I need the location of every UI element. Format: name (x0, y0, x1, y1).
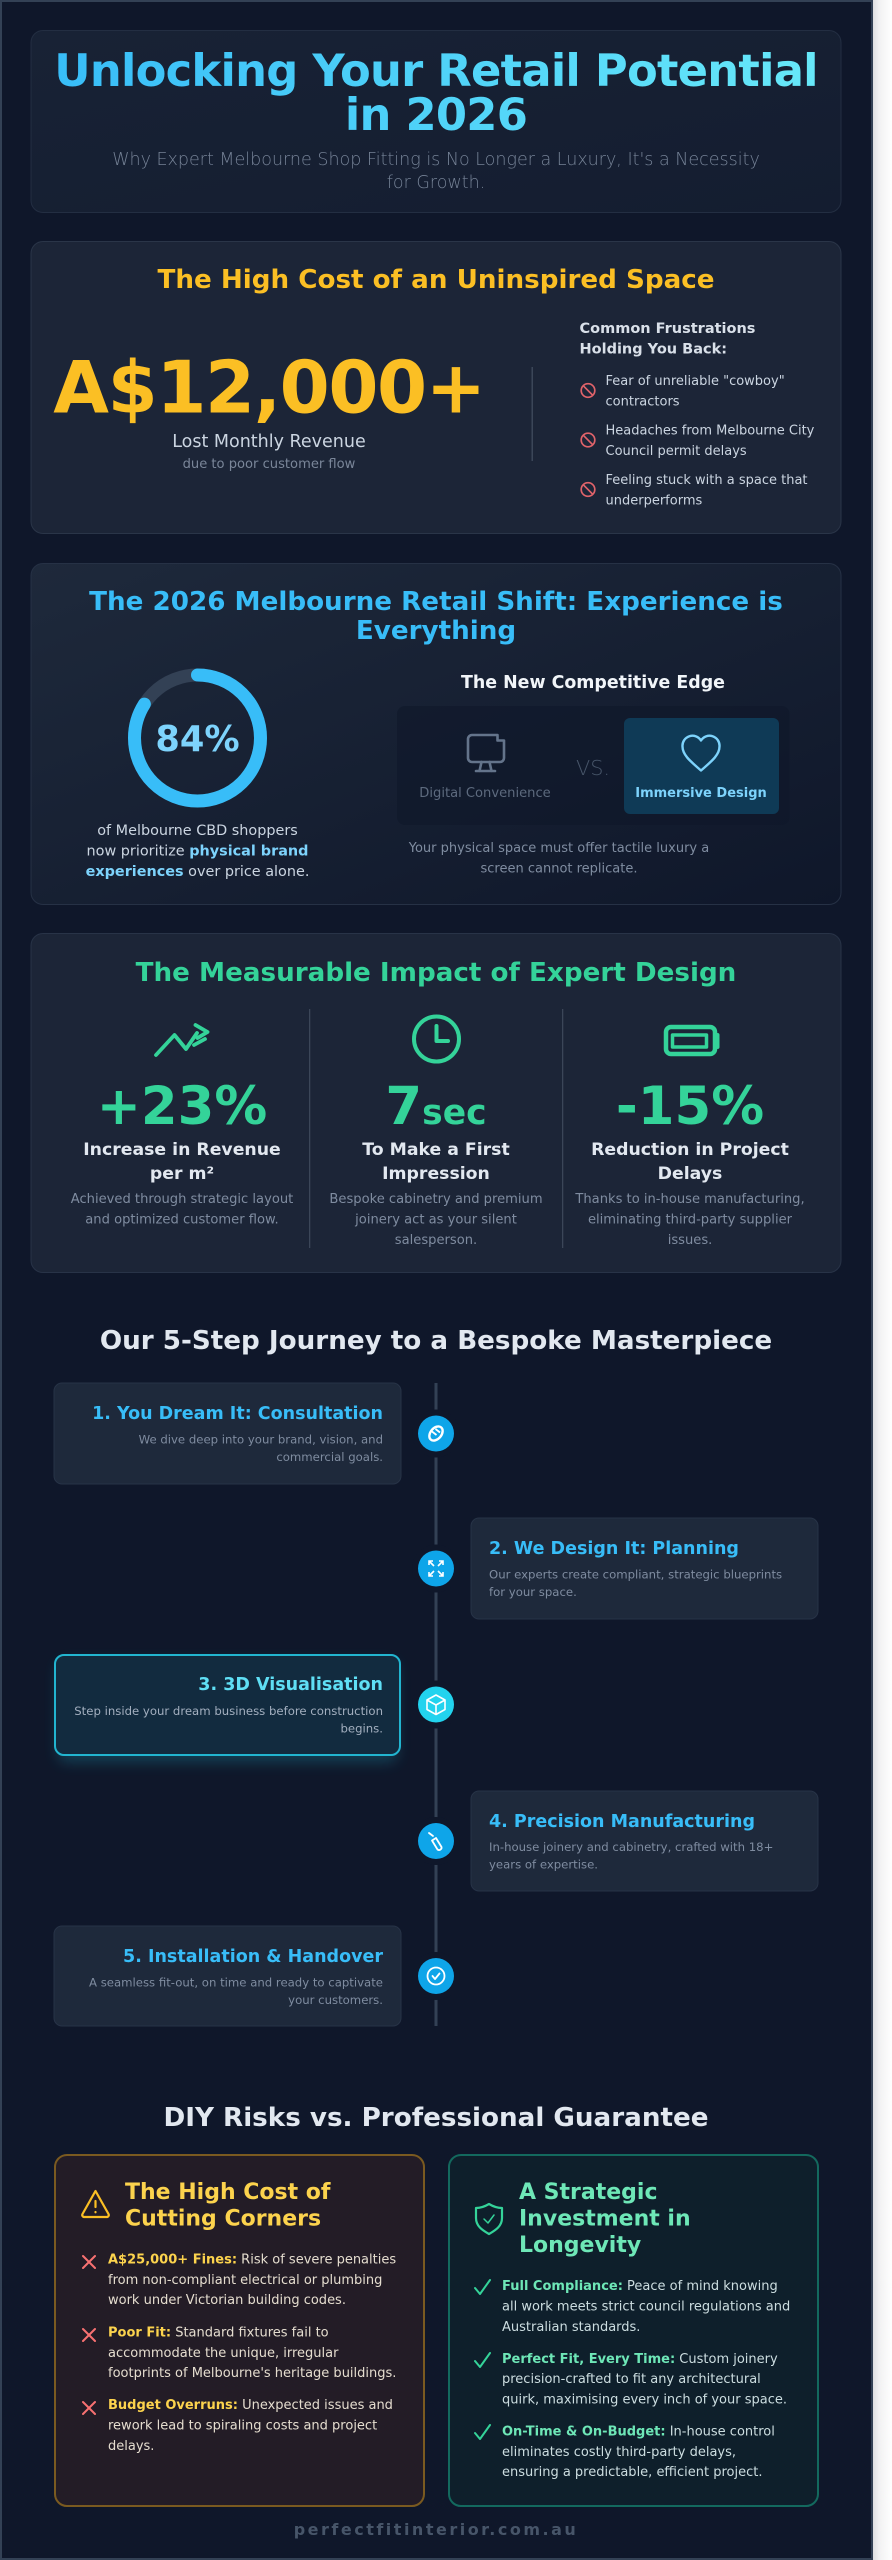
panel: DIY risks (55, 2155, 424, 2506)
comparison box (397, 706, 790, 825)
stat: delays (574, 1027, 805, 1248)
benefit list: ensuring a predictable, efficient project. (502, 2465, 762, 2480)
frustrations list: Council permit delays (606, 444, 747, 459)
stat: delays: Thanks to in-house manufacturing, (574, 1192, 805, 1207)
risk list: rework lead to spiraling costs and project (108, 2418, 377, 2434)
benefit list: eliminates costly third-party delays, (502, 2445, 736, 2460)
step 1 icon (412, 1410, 460, 1458)
benefit list (502, 2279, 790, 2480)
heading (89, 587, 783, 646)
donut chart: 84% (134, 675, 260, 801)
frustrations list: Headaches from Melbourne City (606, 424, 815, 438)
donut caption: now prioritize physical brand (87, 844, 308, 860)
step 4 card: In-house joinery and cabinetry, crafted with 18+ (489, 1840, 773, 1854)
heading: The High Cost of (125, 2180, 331, 2205)
subtitle (112, 150, 760, 193)
step 1 card: commercial goals. (276, 1450, 383, 1464)
step 2 card: for your space. (489, 1585, 577, 1599)
benefit list: all work meets strict council regulations and (502, 2300, 790, 2314)
icon: warning (82, 2191, 109, 2217)
stat: delays: -15% (616, 1076, 764, 1137)
panel: retail shift (31, 564, 841, 904)
stat: revenue: and optimized customer flow. (85, 1212, 279, 1228)
big stat: Lost Monthly Revenue (172, 432, 366, 452)
edge caption: screen cannot replicate. (480, 862, 638, 876)
heading: Investment in (519, 2206, 691, 2232)
risk list: Poor Fit: Standard fixtures fail to (108, 2326, 329, 2340)
step 4 icon (412, 1817, 460, 1865)
risk list: work under Victorian building codes. (108, 2293, 346, 2308)
stat: revenue (71, 1025, 293, 1228)
title: Unlocking Your Retail Potential (54, 44, 818, 97)
donut chart: 84%: 84% (155, 719, 240, 760)
donut caption: of Melbourne CBD shoppers (97, 823, 298, 839)
label: digital: Digital Convenience (419, 786, 551, 801)
heading: Longevity (519, 2233, 641, 2258)
donut caption: experiences over price alone. (86, 864, 309, 880)
donut caption (86, 823, 309, 880)
stat: revenue: Increase in Revenue (83, 1140, 281, 1160)
panel: measurable impact (31, 934, 841, 1272)
guarantee heading: DIY Risks vs. Professional Guarantee (163, 2103, 709, 2133)
stat: revenue: per m² (150, 1164, 214, 1184)
step 5 card: A seamless fit-out, on time and ready to captivate (89, 1976, 383, 1990)
stat: delays: Reduction in Project (591, 1140, 789, 1160)
big stat (53, 346, 485, 472)
frustrations list: Feeling stuck with a space that (606, 473, 808, 488)
icon: trend (156, 1025, 208, 1055)
step 5 card: 5. Installation & Handover (123, 1947, 383, 1967)
heading (519, 2180, 691, 2258)
stat: revenue: Achieved through strategic layout (71, 1192, 293, 1207)
icon: crosses (83, 2256, 95, 2414)
edge caption (408, 841, 709, 876)
step 4 card: 4. Precision Manufacturing (489, 1812, 755, 1832)
icon: clock (414, 1016, 459, 1062)
heading: The High Cost of an Uninspired Space (157, 265, 715, 295)
step 1 card: We dive deep into your brand, vision, and (139, 1432, 383, 1446)
risk list: delays. (108, 2439, 154, 2454)
risk list (108, 2252, 396, 2454)
step 1 card: 1. You Dream It: Consultation (92, 1404, 383, 1424)
frustrations list: contractors (606, 394, 680, 410)
heading: A Strategic (519, 2180, 658, 2205)
risk list: from non-compliant electrical or plumbing (108, 2273, 382, 2288)
heading: Cutting Corners (125, 2206, 321, 2232)
frustrations list: Common Frustrations (580, 321, 755, 337)
timeline (54, 1383, 818, 2026)
frustrations list: Fear of unreliable "cowboy" (606, 374, 785, 389)
panel: header (31, 30, 841, 212)
edge caption: Your physical space must offer tactile luxury a (408, 841, 709, 856)
heading: The Measurable Impact of Expert Design (136, 958, 736, 988)
step 5 card (54, 1926, 401, 2026)
step 4 card: years of expertise. (489, 1858, 598, 1872)
stat: revenue: +23% (97, 1076, 267, 1137)
heading: The 2026 Melbourne Retail Shift: Experience is (89, 587, 783, 617)
stat: first impression: 7sec (385, 1076, 487, 1137)
step 2 card: Our experts create compliant, strategic blueprints (489, 1568, 782, 1582)
benefit list: precision-crafted to fit any architectural (502, 2372, 761, 2387)
icon: shield (476, 2204, 502, 2234)
panel: strategic investment (449, 2155, 818, 2506)
competitive edge heading: The New Competitive Edge (461, 673, 725, 693)
risk list: A$25,000+ Fines: Risk of severe penalties (108, 2252, 396, 2268)
step 3 icon (412, 1680, 460, 1728)
benefit list: On-Time & On-Budget: In-house control (502, 2424, 775, 2440)
frustrations list: underperforms (606, 494, 702, 508)
stat: first impression (329, 1016, 543, 1248)
step 2 icon (412, 1544, 460, 1592)
stat: delays: eliminating third-party supplier (588, 1212, 793, 1228)
icon: battery (666, 1027, 718, 1054)
benefit list: Australian standards. (502, 2320, 640, 2335)
stat: delays: issues. (668, 1233, 712, 1248)
stat: first impression: Bespoke cabinetry and premium (329, 1192, 543, 1207)
frustrations list (580, 321, 815, 508)
subtitle: Why Expert Melbourne Shop Fitting is No Longer a Luxury, It's a Necessity (112, 150, 760, 170)
step 1 card (54, 1383, 401, 1484)
step 3 card: 3. 3D Visualisation (198, 1675, 383, 1695)
benefit list: Perfect Fit, Every Time: Custom joinery (502, 2352, 778, 2367)
step 3 card (55, 1655, 400, 1762)
risk list: Budget Overruns: Unexpected issues and (108, 2398, 393, 2413)
heading: Everything (356, 616, 516, 646)
stat: first impression: salesperson. (395, 1233, 477, 1248)
benefit list: Full Compliance: Peace of mind knowing (502, 2279, 778, 2294)
stat: first impression: joinery act as your silent (354, 1212, 517, 1228)
footer url: perfectfitinterior.com.au (294, 2520, 578, 2539)
vs: VS. (576, 756, 610, 780)
step 2 card: 2. We Design It: Planning (489, 1539, 739, 1559)
title: in 2026 (345, 88, 527, 141)
stat: first impression: To Make a First (362, 1140, 510, 1160)
icon: no symbols (581, 384, 595, 496)
step 5 icon (412, 1952, 460, 2000)
immersive card (624, 718, 779, 814)
title (54, 44, 818, 141)
timeline heading: Our 5-Step Journey to a Bespoke Masterpiece (100, 1326, 772, 1356)
risk list: footprints of Melbourne's heritage buildings. (108, 2366, 396, 2381)
frustrations list: Holding You Back: (580, 342, 727, 358)
stat: first impression: Impression (382, 1164, 490, 1184)
subtitle: for Growth. (387, 173, 485, 193)
step 4 card (471, 1791, 818, 1891)
stat: delays: Delays (658, 1164, 722, 1184)
benefit list: quirk, maximising every inch of your space. (502, 2392, 787, 2408)
icon: heart (682, 736, 720, 770)
step 3 card: Step inside your dream business before construction (74, 1704, 383, 1718)
icon: monitor (468, 735, 504, 771)
heading (125, 2180, 331, 2232)
step 2 card (471, 1518, 818, 1619)
panel: high cost (31, 242, 841, 534)
big stat: A$12,000+ (53, 346, 485, 430)
step 5 card: your customers. (288, 1993, 383, 2007)
big stat: due to poor customer flow (183, 457, 356, 472)
step 3 card: begins. (340, 1722, 383, 1736)
icon: checks (475, 2280, 490, 2439)
risk list: accommodate the unique, irregular (108, 2346, 339, 2361)
immersive card: Immersive Design (635, 786, 767, 801)
